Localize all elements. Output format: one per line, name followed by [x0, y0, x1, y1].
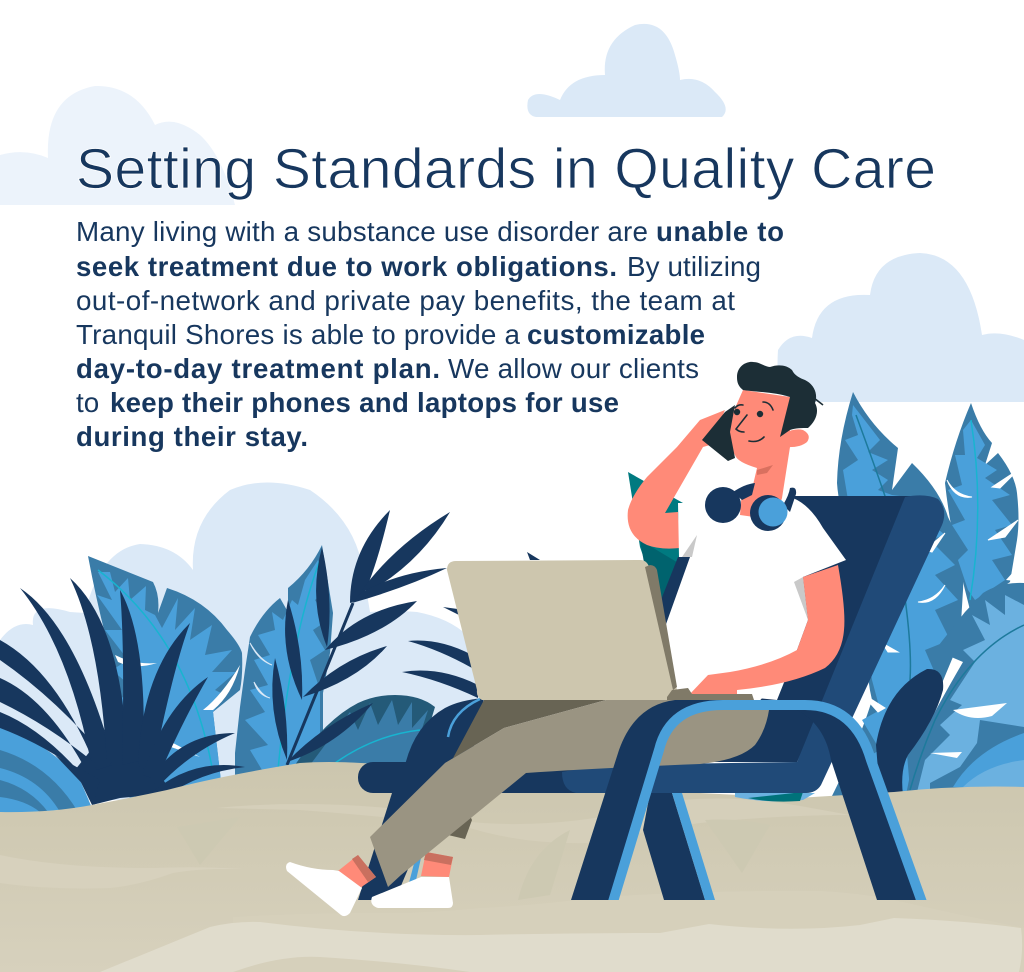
steel blue low leaf: [290, 695, 435, 780]
laptop: [447, 560, 754, 700]
laptop lid: [447, 560, 677, 700]
body paragraph: By utilizing: [627, 251, 761, 282]
dark palm fronds: [0, 578, 245, 805]
body paragraph: [76, 216, 784, 452]
headphones: [705, 483, 796, 531]
chair frame lighter strip and seat: [562, 495, 944, 793]
body paragraph: Tranquil Shores is able to provide a: [76, 319, 521, 350]
body paragraph: to: [76, 387, 99, 418]
seat cushion dark: [358, 762, 648, 793]
near leg: [370, 700, 770, 887]
person: [286, 362, 846, 916]
dark fronds behind laptop: [402, 552, 540, 698]
neck shadow: [757, 465, 773, 475]
cloud: top centre: [527, 24, 726, 117]
sand ground: [0, 762, 1024, 972]
body paragraph: keep their phones and laptops for use: [110, 387, 619, 418]
pale blue leaf lower right: [905, 560, 1024, 800]
rear left chair leg: [358, 793, 440, 900]
lounge chair back parts: [358, 495, 944, 900]
shirt shadows: [682, 535, 808, 620]
ear: [785, 429, 809, 447]
body paragraph: customizable: [527, 319, 705, 350]
left frame arch: [405, 698, 484, 765]
back dune: [0, 762, 1024, 972]
chair back: [700, 496, 920, 762]
cloud: top left: [0, 86, 235, 205]
plants: right foliage group: [628, 392, 1024, 800]
rear chair leg centre: [643, 793, 705, 900]
t-shirt: [665, 487, 846, 700]
lid edge: [645, 565, 677, 690]
foliage glimpse under seat: [735, 793, 815, 801]
body paragraph: day-to-day treatment plan.: [76, 353, 440, 384]
front dune: [100, 918, 1022, 972]
dark arch: [571, 700, 916, 900]
resting arm: [688, 565, 844, 696]
far sock: [421, 852, 453, 877]
bottom left leaf: [0, 725, 95, 820]
body paragraph: seek treatment due to work obligations.: [76, 251, 617, 282]
body paragraph: during their stay.: [76, 421, 308, 452]
near shoe: [286, 862, 362, 916]
tall leaf behind chair: [830, 392, 963, 800]
body paragraph: We allow our clients: [448, 353, 699, 384]
light streaks: [217, 798, 850, 843]
cloud: behind left plants: [0, 482, 480, 800]
face details: [735, 402, 773, 442]
mid dune: [233, 891, 1024, 972]
chair left sliver behind shirt: [655, 557, 692, 632]
plant shadows in sand: [177, 817, 770, 900]
chair front frame: [571, 700, 923, 905]
front dune shadow: [233, 957, 470, 972]
near sock: [338, 855, 376, 888]
raised arm: [628, 410, 725, 549]
phone: [702, 405, 735, 461]
teal glimpse under seat: [748, 792, 803, 802]
big blue leaf centre: [235, 545, 333, 780]
laptop base: [667, 688, 754, 700]
far shoe: [371, 877, 453, 908]
far leg shadow: [420, 700, 606, 839]
hair: [737, 362, 817, 437]
title: Setting Standards in Quality Care: [76, 137, 936, 201]
neck and face: [730, 390, 790, 520]
tall leaf far right: [945, 403, 1018, 610]
blue frame highlight: [612, 705, 923, 905]
dark bamboo sprig: [272, 510, 450, 765]
big blue leaf left: [88, 556, 242, 800]
body paragraph: out-of-network and private pay benefits, the team at: [76, 285, 735, 316]
dark rounded leaf: [876, 669, 943, 795]
plants: left foliage group: [0, 510, 540, 820]
body paragraph: Many living with a substance use disorder are: [76, 216, 648, 247]
cloud: right: [778, 253, 1024, 402]
body paragraph: unable to: [656, 216, 784, 247]
teal leaf behind raised arm: [628, 472, 690, 612]
